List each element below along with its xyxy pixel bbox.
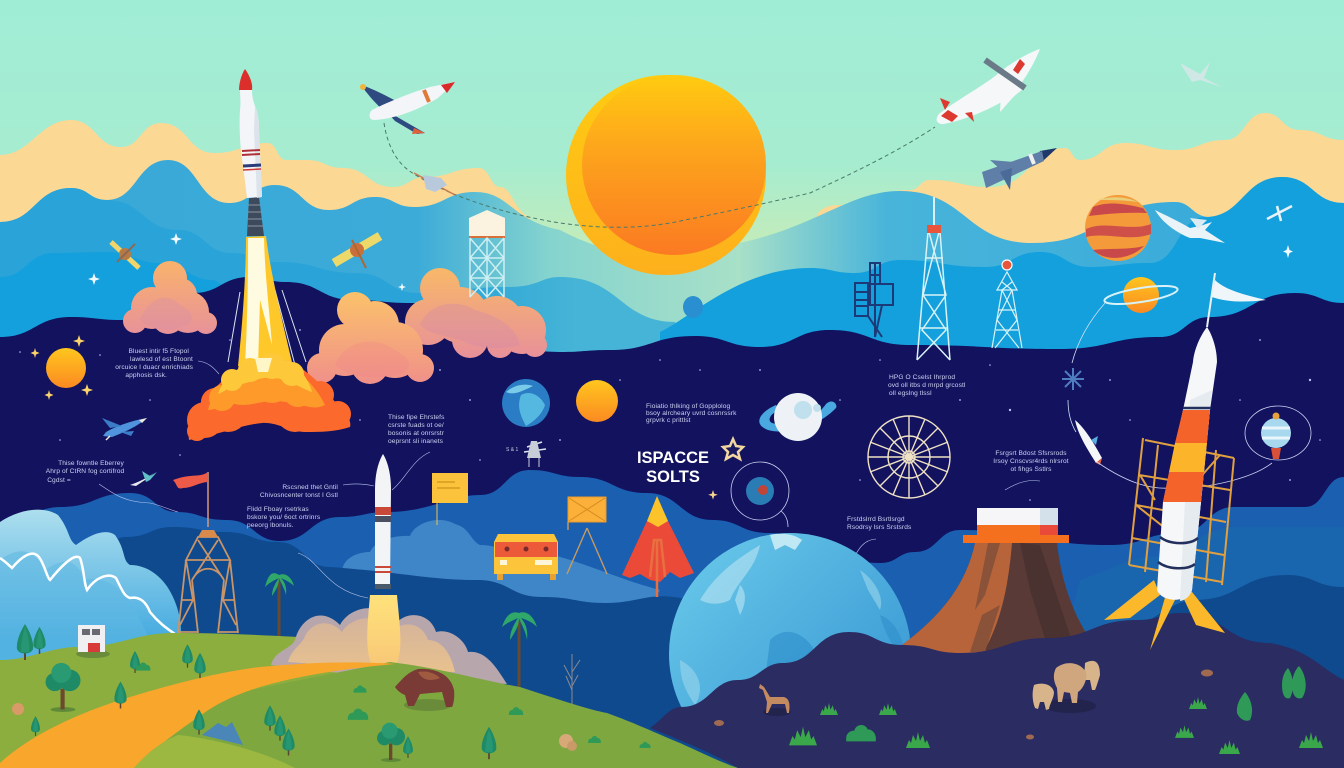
rocket two flame [367, 595, 400, 665]
gold stars left [30, 335, 93, 400]
rocket stripes [1175, 410, 1210, 443]
night sky band [0, 277, 1344, 560]
lattice tower: small [992, 260, 1022, 348]
earth globe [669, 533, 911, 768]
small lander: S & 1 [506, 447, 518, 453]
annotation: rocket two label [260, 484, 338, 499]
annotation: rocket two lower: peeorg lbonuls. [247, 522, 294, 529]
peach clouds: left [0, 120, 540, 300]
blue plane left [102, 418, 147, 440]
lattice launch tower [173, 472, 238, 633]
rocket booster coupling [247, 197, 264, 236]
annotation: rocket two lower: Flidd Fboay rsetrkas [247, 506, 309, 513]
annotation: left lower: Ahrp of CtRN fog cortifrod [46, 468, 124, 475]
orbit with capsule [1245, 406, 1311, 460]
green hill: centre [120, 662, 738, 768]
explosion fireball [187, 353, 351, 441]
rocket two [375, 454, 391, 589]
llama [759, 684, 791, 716]
sky background [0, 0, 1344, 300]
rocket stripes [242, 150, 260, 155]
annotation: fourth block [388, 414, 445, 445]
orbit with small earth [731, 462, 789, 527]
missile: blue [982, 148, 1057, 190]
annotation: fireball: lawlesd of est Btoont [130, 356, 193, 363]
annotation: above earth: Frstdslrrd Bsrtlsrgd [847, 516, 905, 523]
annotation: above earth [847, 516, 912, 531]
rocket two exhaust smoke [271, 608, 507, 684]
trees [17, 624, 496, 762]
right gantry [1129, 438, 1234, 585]
starburst [1062, 368, 1084, 390]
annotation: centre top [646, 403, 737, 424]
gold star [723, 439, 743, 459]
orbit curve behind rocket [1097, 462, 1272, 488]
rocks [12, 670, 1213, 751]
main launch rocket [228, 69, 306, 366]
annotation: upper right: oll egslng tlssl [889, 390, 932, 397]
green hill: lower foreground [134, 735, 295, 768]
peach clouds: right [815, 113, 1344, 300]
wave layer: mid blue [0, 470, 1344, 768]
annotation: fireball [115, 348, 194, 379]
annotation: left lower: Thise fowntle Eberrey [58, 460, 125, 467]
green bushes [136, 662, 651, 748]
annotation: rocket base [993, 450, 1069, 473]
red tent rocket [622, 496, 694, 597]
annotation: rocket base: Fsrgsrt Bdost Sfsrsrods [995, 450, 1067, 457]
saturn planet [1103, 277, 1179, 313]
annotation: rocket two label: Rscsned thet Gntil [282, 484, 338, 491]
satellite centre left [334, 236, 380, 268]
annotation: fireball: orcuice I duacr enrichiads [115, 364, 194, 371]
annotation: fourth block: bosonis at onrsrstr [388, 430, 445, 437]
annotation: fireball: apphosis dsk. [125, 372, 167, 379]
pennant on rocket [1207, 273, 1266, 327]
title [637, 449, 709, 486]
leader lines [99, 452, 1040, 598]
mid mountain left and centre [0, 188, 720, 430]
rocket gantry lines [228, 290, 306, 365]
annotation: fourth block: Thise fipe Ehrstefs [388, 414, 445, 421]
wave layer: right lighter ridge [1050, 527, 1344, 700]
orbit trail from saturn [1068, 303, 1105, 432]
volcano [902, 543, 1101, 670]
annotation: rocket two lower: bskore you/ 6oct ortrinrs [247, 514, 321, 521]
mini building [76, 625, 110, 658]
annotation: upper right [888, 374, 966, 397]
launch clouds: large pink right [405, 268, 547, 358]
annotation: centre top: grpvrk c prittlst [646, 417, 691, 424]
leader line from fireball text [198, 361, 219, 374]
annotation: rocket two lower [247, 506, 321, 529]
rocket exhaust flame [238, 236, 292, 366]
treasure chest console [494, 534, 558, 580]
annotation: rocket base: Irsoy Cnscvsr4rds nlrsrot [993, 458, 1069, 465]
annotation: above earth: Rsodrsy lsrs Srstsrds [847, 524, 912, 531]
billboard envelope [567, 497, 607, 574]
annotation: upper right: ovd oll itbs d mrpd grcostl [888, 382, 966, 389]
near mountain left [0, 252, 300, 420]
lattice tower: red cap [917, 197, 950, 360]
blue rock outcrop [202, 722, 243, 745]
launch clouds: middle pink [307, 292, 434, 384]
dead tree [564, 654, 580, 707]
white ringed planet [759, 393, 836, 441]
annotation: fireball: Bluest intir f5 Ftopol [129, 348, 189, 355]
orange planet centre [576, 380, 618, 422]
rhino [395, 669, 454, 711]
water tower [469, 210, 505, 297]
annotation: rocket base: ot fihgs Sstlrs [1010, 466, 1052, 473]
spoked wheel [868, 416, 950, 498]
volcano top block [963, 508, 1069, 543]
small teal orb [683, 296, 703, 318]
small lander [506, 441, 546, 467]
launch clouds: small pink [123, 261, 217, 334]
rocket fins [1104, 580, 1160, 620]
left cumulus cloud [0, 510, 181, 670]
near mountain right [660, 177, 1344, 430]
plane: white right [1155, 210, 1225, 243]
sheep group [1033, 661, 1100, 713]
annotation: rocket two label: Chivosncenter tonst I Gstl [260, 492, 338, 499]
far mountain range [0, 160, 1344, 420]
small gold star [708, 490, 718, 500]
signboard [432, 473, 468, 525]
jupiter planet [1085, 195, 1151, 261]
green hill: left [0, 633, 390, 768]
leafy plants [1237, 666, 1306, 721]
title: ISPACCE [637, 449, 709, 467]
plane: tiny pale top right [1180, 62, 1222, 87]
annotation: fourth block: oeprsnt sli inanets [388, 438, 444, 445]
title: SOLTS [646, 468, 700, 486]
satellite left [111, 242, 139, 268]
wave layer: deep blue [0, 527, 900, 768]
palm tree 2 [502, 612, 537, 688]
white sparkles on mountains [88, 233, 1293, 291]
shrubs on dark hill [789, 697, 1323, 754]
palm tree 1 [265, 573, 294, 637]
annotation: left lower: Cgdst = [47, 477, 71, 484]
annotation: upper right: HPG O Cselst Ihrprod [889, 374, 955, 381]
dark hill [650, 613, 1344, 768]
plane: small lower [414, 173, 455, 195]
starfield [19, 329, 1321, 501]
small white rocket [1075, 420, 1102, 465]
annotation: left lower [46, 460, 125, 484]
rocket body [240, 90, 262, 198]
annotation: fourth block: csrste fuads ot oe/ [388, 422, 444, 429]
small jet left [130, 471, 157, 486]
wave layer: right dark ridge [1150, 575, 1344, 720]
globe small [502, 379, 550, 427]
annotation: centre top: bsoy alrcheary uvrd cosnrssrk [646, 410, 737, 417]
satellite tiny right [1267, 206, 1292, 221]
plane: upper left [360, 82, 455, 134]
sun [566, 75, 766, 275]
dashed flight path [384, 123, 935, 227]
annotation: centre top: Fioiatio thlking of Gopplolog [646, 403, 731, 410]
right rocket [1104, 327, 1225, 650]
dark scaffold tower [855, 263, 893, 337]
plane: top right [937, 49, 1040, 124]
rocket nose cone [239, 69, 252, 90]
orange planet left [46, 348, 86, 388]
orange road [0, 662, 395, 768]
background cloud behind small rocket [342, 520, 660, 620]
